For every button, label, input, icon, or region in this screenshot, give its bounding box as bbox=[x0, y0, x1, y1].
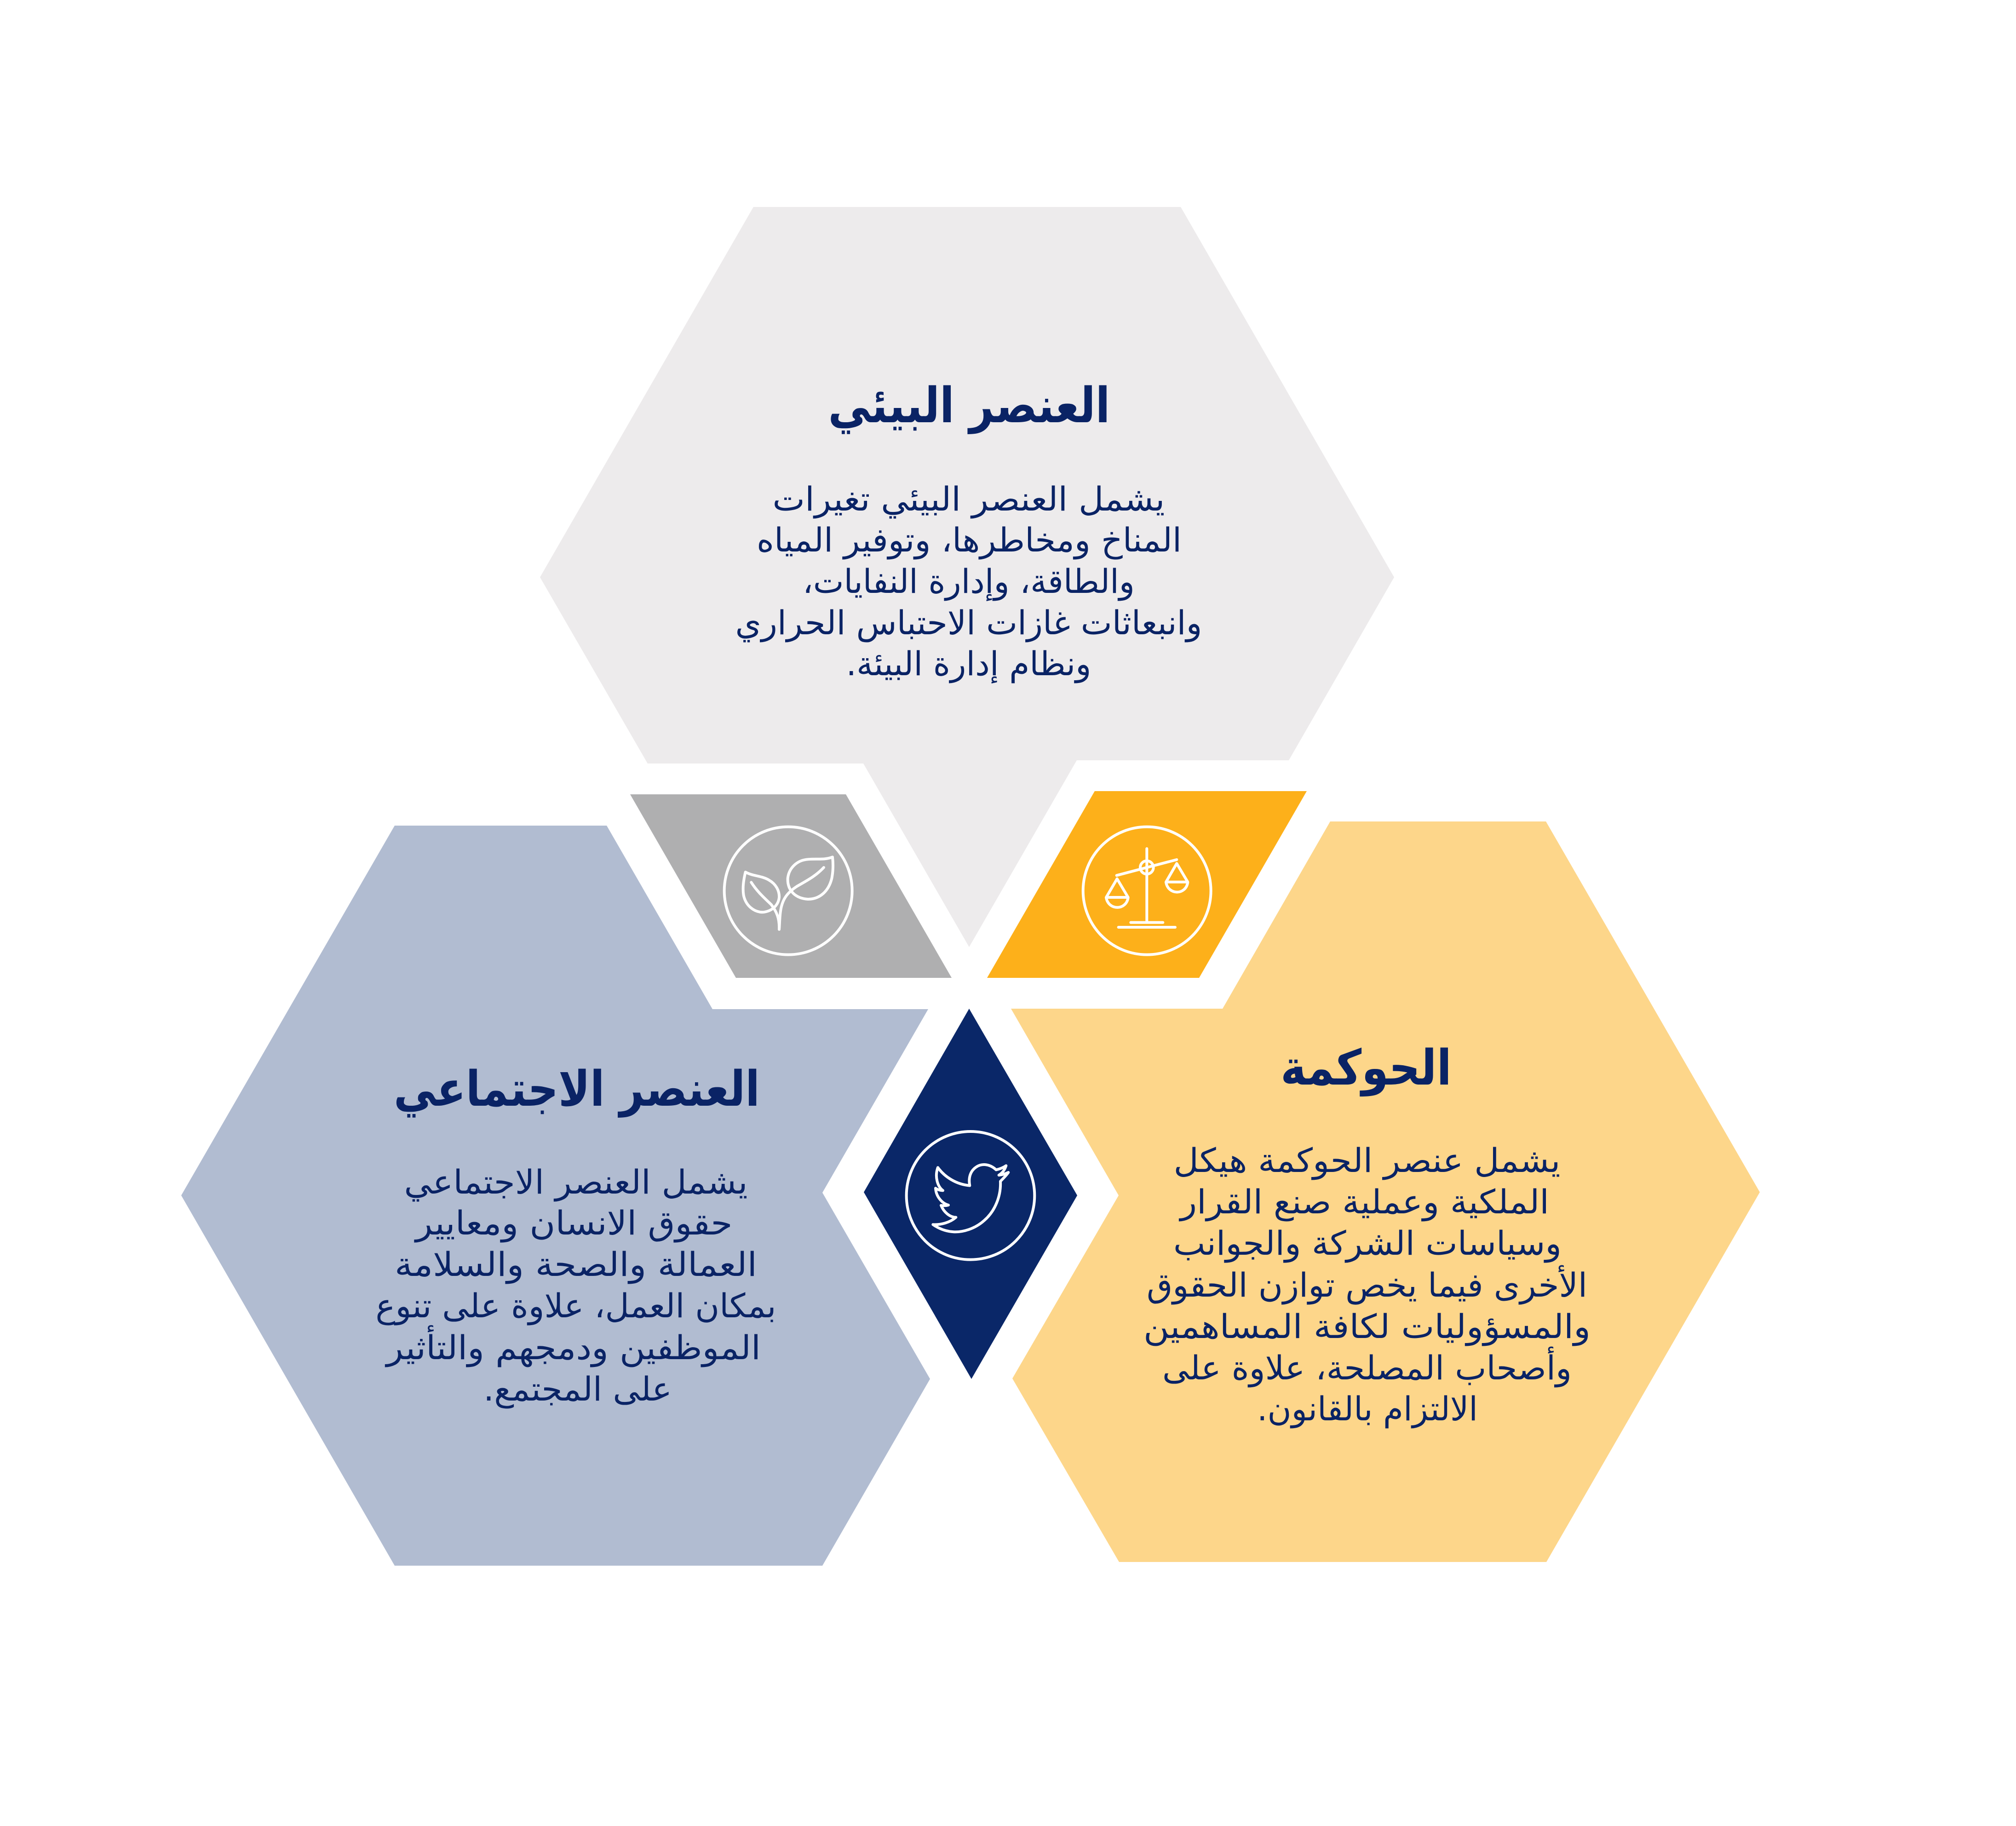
text block: governance description: الأخرى فيما يخص توازن الحقوق bbox=[1147, 1265, 1587, 1305]
text block: governance description: يشمل عنصر الحوكمة هيكل bbox=[1174, 1141, 1560, 1180]
text block: environmental description: يشمل العنصر البيئي تغيرات bbox=[773, 480, 1165, 519]
text block: social description: حقوق الانسان ومعايير bbox=[414, 1204, 732, 1243]
panel: governance element bbox=[1011, 821, 1760, 1562]
parallelogram: orange bbox=[987, 791, 1307, 978]
panel: environmental element bbox=[540, 207, 1394, 947]
text block: governance description bbox=[1143, 1141, 1591, 1429]
text block: governance description: وسياسات الشركة والجوانب bbox=[1173, 1224, 1562, 1263]
icon: leaves bbox=[724, 827, 852, 955]
hexagon: social bbox=[181, 826, 930, 1566]
hexagon: governance bbox=[1011, 821, 1760, 1562]
parallelogram: grey bbox=[630, 794, 952, 978]
text block: social description bbox=[375, 1163, 776, 1409]
text block: environmental description: وانبعاثات غازات الاحتباس الحراري bbox=[735, 603, 1202, 643]
text block: social description: يشمل العنصر الاجتماعي bbox=[404, 1163, 748, 1202]
panel: navy bird tile bbox=[864, 1009, 1077, 1379]
panel: social element bbox=[181, 826, 930, 1566]
hexagon: environmental bbox=[540, 207, 1394, 947]
text block: governance description: وأصحاب المصلحة، علاوة على bbox=[1162, 1346, 1572, 1388]
panel: grey leaf tile bbox=[630, 794, 952, 978]
heading: environmental: العنصر البيئي bbox=[828, 377, 1110, 434]
diamond: navy bbox=[864, 1009, 1077, 1379]
text block: environmental description: والطاقة، وإدارة النفايات، bbox=[803, 562, 1135, 601]
icon: bird bbox=[907, 1131, 1034, 1260]
panel: orange scales tile bbox=[987, 791, 1307, 978]
text block: governance description: الملكية وعملية صنع القرار bbox=[1179, 1183, 1549, 1222]
heading: governance: الحوكمة bbox=[1281, 1039, 1452, 1097]
text block: governance description: الالتزام بالقانون. bbox=[1257, 1390, 1478, 1429]
text block: environmental description bbox=[735, 480, 1202, 683]
text block: environmental description: ونظام إدارة البيئة. bbox=[846, 644, 1091, 683]
text block: governance description: والمسؤوليات لكافة المساهمين bbox=[1143, 1307, 1591, 1346]
icon: balance scales bbox=[1083, 827, 1211, 955]
text block: environmental description: المناخ ومخاطرها، وتوفير المياه bbox=[757, 521, 1182, 560]
text block: social description: الموظفين ودمجهم والتأثير bbox=[385, 1325, 761, 1367]
text block: social description: بمكان العمل، علاوة على تنوع bbox=[375, 1286, 776, 1326]
text block: social description: على المجتمع. bbox=[483, 1370, 672, 1409]
text block: social description: العمالة والصحة والسلامة bbox=[395, 1245, 757, 1284]
heading: social: العنصر الاجتماعي bbox=[394, 1061, 760, 1118]
